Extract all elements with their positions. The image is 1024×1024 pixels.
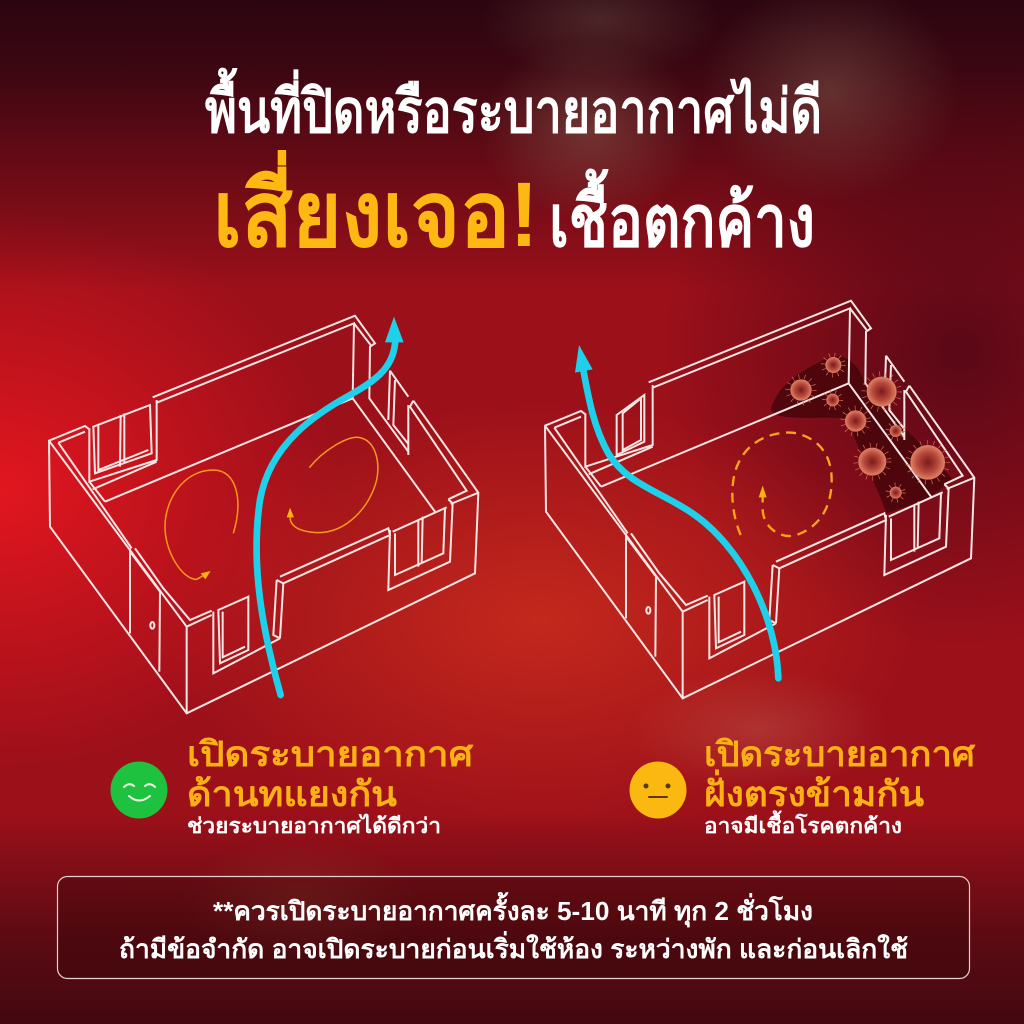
- virus particles: [788, 355, 948, 500]
- dashed swirl arrow: [732, 433, 832, 536]
- cyan airflow arrow: [575, 345, 778, 678]
- title highlight: เสี่ยงเจอ!: [213, 149, 538, 266]
- heading: เปิดระบายอากาศ: [704, 735, 976, 774]
- swirl arrow left: [165, 470, 238, 579]
- door knob: [150, 622, 154, 629]
- note line 1: **ควรเปิดระบายอากาศครั้งละ 5-10 นาที ทุก 2 ชั่วโมง: [213, 891, 813, 928]
- room line drawing: [545, 301, 974, 698]
- note box: [58, 876, 970, 978]
- heading line 2: ฝั่งตรงข้ามกัน: [704, 769, 924, 814]
- door knob: [646, 607, 650, 614]
- swirl arrow right: [287, 437, 378, 533]
- stagnant air shadow: [771, 356, 953, 513]
- description: อาจมีเชื้อโรคตกค้าง: [704, 810, 902, 838]
- heading line 2: ด้านทแยงกัน: [187, 775, 397, 814]
- note panel: [58, 876, 970, 978]
- title line 2: เชื้อตกค้าง: [549, 168, 815, 262]
- note line 2: ถ้ามีข้อจำกัด อาจเปิดระบายก่อนเริ่มใช้ห้อง ระหว่างพัก และก่อนเลิกใช้: [119, 930, 908, 964]
- caption: opposite side ventilation: [630, 735, 976, 838]
- icon: happy face: [110, 762, 168, 818]
- title: [205, 67, 822, 266]
- icon: neutral face: [630, 762, 686, 818]
- description: ช่วยระบายอากาศได้ดีกว่า: [187, 813, 441, 838]
- panel: diagonal ventilation room: [49, 316, 478, 713]
- title line 1: พื้นที่ปิดหรือระบายอากาศไม่ดี: [205, 67, 822, 145]
- cyan airflow arrow: [257, 317, 404, 695]
- room line drawing: [49, 316, 478, 713]
- panel: opposite side ventilation room: [545, 301, 974, 698]
- caption: diagonal ventilation: [110, 735, 474, 838]
- heading: เปิดระบายอากาศ: [187, 735, 474, 774]
